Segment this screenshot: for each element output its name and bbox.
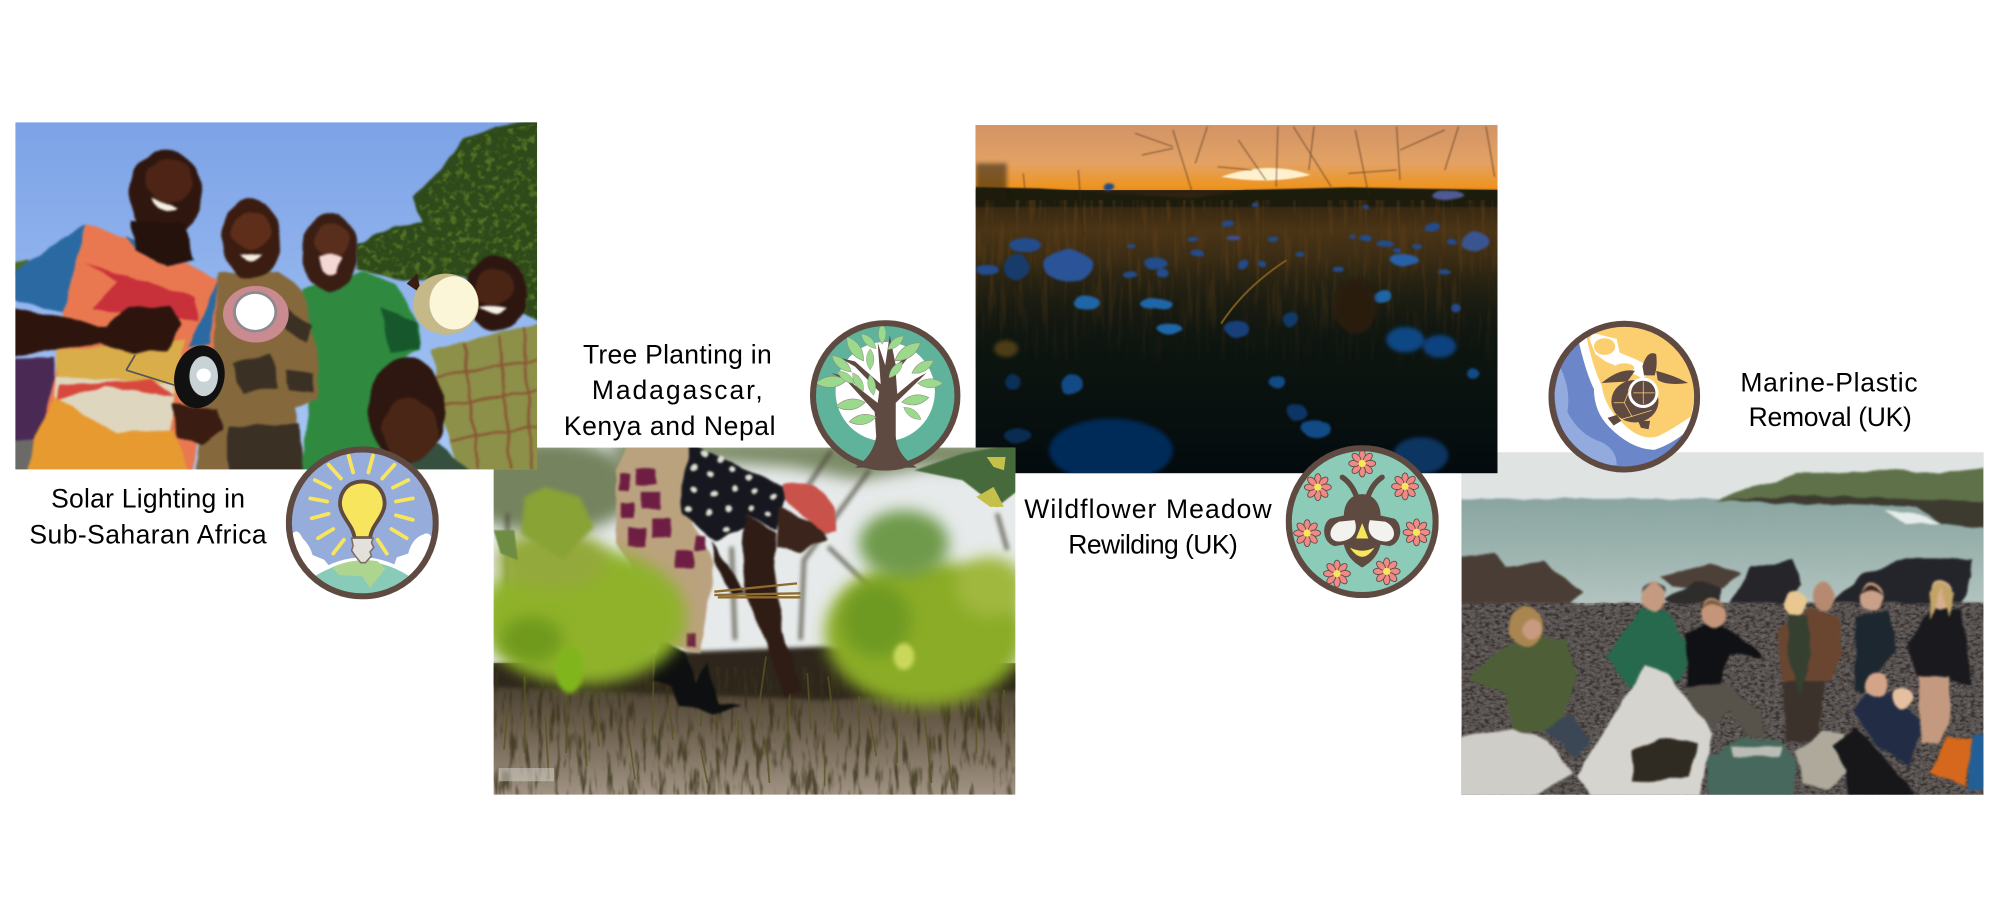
caption: tree planting: Madagascar, bbox=[592, 375, 763, 405]
caption: wildflower meadow bbox=[1024, 494, 1272, 560]
boy in orange racer t-shirt bbox=[6, 151, 223, 477]
caption: marine plastic bbox=[1740, 368, 1918, 432]
caption: solar lighting bbox=[29, 484, 267, 549]
boy in green shirt bbox=[299, 213, 419, 477]
solar lamp: cream light bbox=[407, 274, 479, 335]
small child bbox=[368, 357, 475, 477]
caption: wildflower meadow: Rewilding (UK) bbox=[1068, 530, 1238, 560]
caption: marine plastic: Marine-Plastic bbox=[1740, 368, 1918, 398]
caption: solar lighting: Sub-Saharan Africa bbox=[29, 519, 267, 549]
icon: turtle and plastic badge bbox=[1548, 320, 1700, 472]
caption: tree planting bbox=[564, 339, 776, 441]
photo: children with solar lamps bbox=[15, 122, 538, 470]
photo: woman planting mangrove seedlings bbox=[494, 448, 1016, 795]
boy in plaid shirt bbox=[432, 256, 550, 477]
solar lamp: pink ring light bbox=[223, 286, 289, 342]
boy in camouflage jacket bbox=[196, 199, 318, 477]
photo: marine-plastic removal beach clean-up team bbox=[1462, 452, 1984, 795]
caption: wildflower meadow: Wildflower Meadow bbox=[1024, 494, 1273, 524]
solar lamp: black hand lantern bbox=[126, 342, 230, 412]
caption: solar lighting: Solar Lighting in bbox=[51, 484, 245, 514]
caption: marine plastic: Removal (UK) bbox=[1749, 402, 1912, 432]
caption: tree planting: Tree Planting in bbox=[583, 339, 772, 369]
caption: tree planting: Kenya and Nepal bbox=[564, 411, 776, 441]
icon: solar bulb badge bbox=[286, 446, 439, 600]
icon: tree badge bbox=[810, 320, 960, 470]
photo: wildflower meadow at sunset bbox=[976, 125, 1498, 474]
icon: bee and flowers badge bbox=[1286, 445, 1439, 598]
